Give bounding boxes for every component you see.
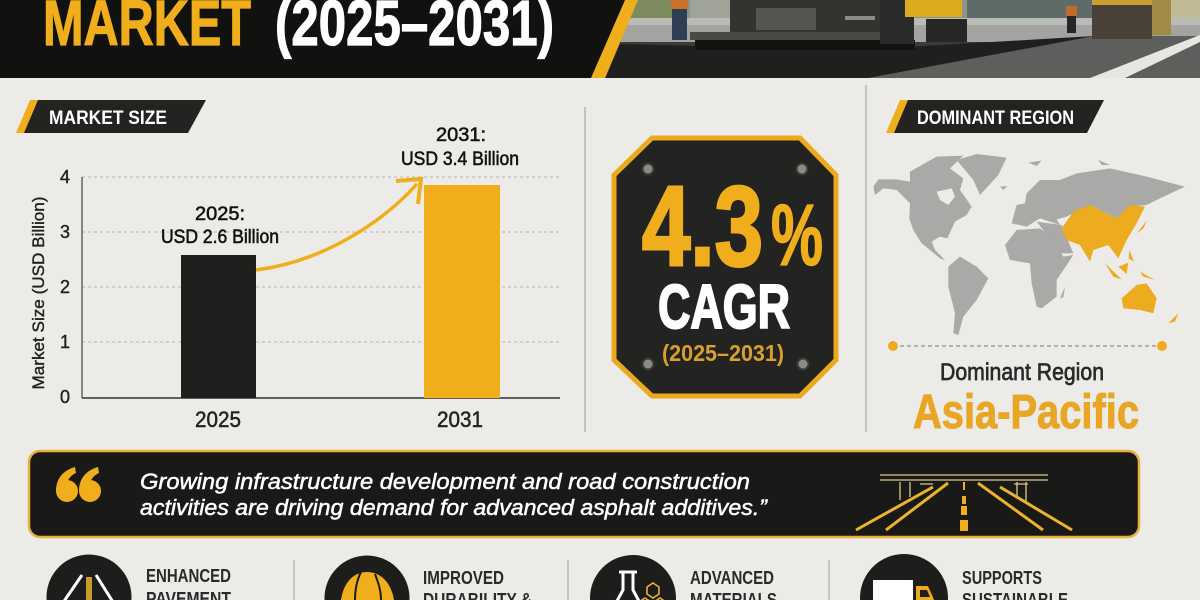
bar chart: 2025	[195, 407, 241, 432]
workers	[671, 0, 1077, 40]
bar chart: 0	[60, 387, 70, 407]
bar chart: 2031:	[436, 125, 486, 146]
icon: hard hat	[324, 556, 410, 600]
benefit: supports sustainable	[860, 554, 1068, 600]
header yellow slash	[591, 0, 638, 78]
icon: highway overpass	[856, 475, 1072, 531]
bar chart: 2031	[437, 407, 483, 432]
growth arrow	[256, 179, 421, 270]
bar chart: 2	[60, 277, 70, 297]
header banner	[0, 0, 1200, 78]
bottom dividers	[294, 560, 829, 600]
divider lines	[585, 85, 866, 432]
dominant region heading: DOMINANT REGION	[917, 108, 1074, 129]
benefit: advanced materials: ADVANCED	[690, 568, 774, 588]
panel: CAGR badge	[614, 138, 836, 396]
title	[43, 0, 554, 59]
bar chart: USD 2.6 Billion	[161, 227, 279, 248]
header road construction photo	[600, 0, 1200, 78]
benefit: improved durability: IMPROVED	[423, 568, 504, 588]
benefit: supports sustainable: SUPPORTS	[962, 568, 1042, 588]
CAGR value: 4.3	[642, 163, 763, 289]
header dark panel	[0, 0, 632, 78]
badge screws	[642, 164, 808, 370]
icon: road	[46, 554, 132, 600]
CAGR label: CAGR	[658, 273, 790, 342]
panel: dominant region	[873, 100, 1185, 439]
benefit: enhanced pavement: ENHANCED	[146, 566, 231, 586]
quote banner	[29, 451, 1139, 537]
market size heading: MARKET SIZE	[49, 108, 167, 129]
bar chart: USD 3.4 Billion	[401, 149, 519, 170]
bar chart: 4	[60, 167, 70, 187]
icon: flask and hexagons	[590, 555, 676, 600]
quote text: activities are driving demand for advanced asphalt additives.”	[140, 495, 769, 520]
Hudson Bay	[937, 188, 955, 205]
bar chart: 2025:	[195, 204, 245, 225]
region name: Asia-Pacific	[913, 386, 1139, 439]
bar chart: 3	[60, 222, 70, 242]
benefit: advanced materials	[590, 555, 777, 600]
quote text	[140, 469, 769, 520]
panel: market size	[16, 100, 560, 432]
world map	[873, 154, 1185, 335]
dashed connector	[888, 341, 1167, 351]
quote mark	[56, 467, 101, 502]
benefit: improved durability	[324, 556, 532, 600]
quote text: Growing infrastructure development and road construction	[140, 469, 750, 494]
bar chart: 1	[60, 332, 70, 352]
benefit: enhanced pavement	[46, 554, 231, 600]
bar chart	[29, 125, 560, 432]
market size heading	[16, 100, 206, 133]
CAGR period: (2025–2031)	[662, 340, 784, 366]
road roller	[1092, 0, 1171, 39]
region label: Dominant Region	[940, 359, 1104, 386]
CAGR value: %	[771, 188, 823, 284]
dominant region heading	[886, 100, 1104, 133]
icon: truck	[860, 554, 948, 600]
bar chart: Market Size (USD Billion)	[29, 196, 48, 390]
paver machine	[690, 0, 967, 50]
